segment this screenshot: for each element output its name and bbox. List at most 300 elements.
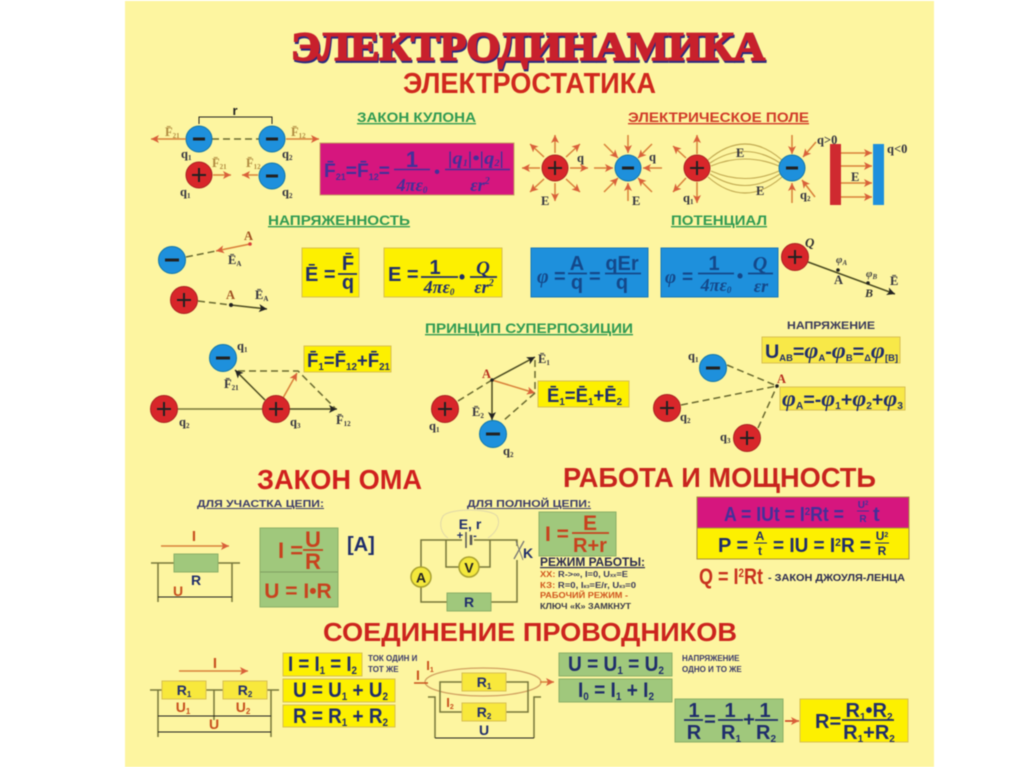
formula: potential sum: φ [782,386,796,411]
formula: E1 = E1 + E2: 1 [559,397,565,408]
formula box: work: 2 [805,506,810,518]
formula: series current: 1 [320,665,325,677]
diagram: Coulomb forces: F̄ [291,125,299,139]
formula: potential sum: =- [803,390,821,411]
diagram: series connection: 1 [187,690,192,699]
diagram: potential of a point charge: B [871,273,877,281]
formula box: work: 2 [865,501,869,507]
diagram: full circuit: A [416,570,426,586]
formula: series current [283,653,362,677]
formula: φ = 1/4πε0 · Q/εr: φ [665,267,676,288]
formula: potential sum: + [841,390,852,411]
formula: voltage: B [846,353,853,363]
diagram: potential superposition: 3 [727,437,731,445]
formula: E = F/q: Ē = [305,264,336,286]
diagram: field superposition: Ē [538,352,546,366]
note: same current: ТОК ОДИН И [368,654,418,663]
diagram: parallel connection: I [416,667,420,683]
formula: φ = 1/4πε0 · Q/εr: 4πε [701,275,727,295]
formula: Coulomb law [320,143,514,195]
diagram: full circuit [411,510,533,611]
formula: parallel resistance: = [704,709,716,731]
diagram: field superposition: 1 [436,426,440,434]
diagram: field strength at point A: А [236,260,241,268]
diagram: parallel connection: I [446,695,450,710]
diagram: potential of a point charge: Q [805,235,815,250]
formula: potential sum: φ [883,386,897,411]
diagram: potential of a point charge: φ [866,268,872,280]
formula: voltage [762,337,900,363]
formula box: work: t [873,504,880,526]
formula: Coulomb law: 21 [336,172,346,182]
diagram: series connection: R [177,682,187,698]
diagram: dipole field lines: 2 [807,195,811,203]
formula: voltage: Δ [864,353,871,363]
note: same current: ТОТ ЖЕ [368,665,399,674]
formula: parallel current: 0 [583,691,589,703]
formula: Coulomb law: 1 [463,158,468,168]
diagram: Coulomb forces: q [282,185,289,199]
formula box: full-circuit Ohm's law: E [583,512,597,535]
formula: φ = A/q = qEr/q: φ [537,266,549,288]
formula: parallel resistance: R [687,722,702,744]
formula: E = F/q: q [342,272,354,294]
note: same voltage: НАПРЯЖЕНИЕ [682,654,740,663]
formula: E = 1/4πε0 · Q/εr² [384,248,502,297]
diagram: circuit section: R [191,572,201,588]
diagram: field of positive charge: q [577,151,584,165]
formula: φ = 1/4πε0 · Q/εr: • [737,266,743,286]
formula: E1 = E1 + E2: 1 [588,397,594,408]
diagram: full circuit: K [523,545,533,561]
diagram: dipole field lines: q [800,188,807,202]
diagram: parallel connection [414,658,554,738]
formula: E1 = E1 + E2: Ē [547,386,560,407]
diagram: series connection: U [209,716,219,732]
formula: φ = 1/4πε0 · Q/εr: = [682,267,693,288]
formula: voltage: = [793,342,804,363]
diagram: Coulomb forces: 12 [254,163,261,171]
formula: parallel voltage: U = U [568,653,622,676]
diagram: force superposition [150,339,351,430]
note: same current [368,654,418,674]
formula: series current: I = I [288,653,324,676]
formula: equivalent resistance: 2 [887,712,893,723]
arrow: to equivalent resistance [785,720,799,722]
diagram: full circuit: V [464,560,474,576]
diagram: series connection: U [176,699,186,715]
diagram: parallel connection: 2 [487,712,492,721]
formula: Coulomb law: 1 [406,147,418,172]
diagram: force superposition: 3 [297,422,301,430]
diagram: field strength at point A: А [244,229,253,243]
diagram: series connection: I [213,655,217,672]
diagram: Coulomb forces: q [181,147,188,161]
formula: voltage: - [825,342,832,363]
diagram: field strength at point A [158,229,268,314]
text block: operating modes: ХХ: R->∞, I=0, U хх=E [540,570,629,579]
formula: equivalent resistance: 2 [889,734,895,745]
formula: E = 1/4πε0 · Q/εr²: • [459,267,465,287]
diagram: parallel connection: R [477,704,487,720]
diagram: potential superposition: q [720,430,727,444]
formula: Coulomb law: F̄ [324,161,336,182]
formula: Coulomb law: εr [470,175,485,195]
diagram: force superposition: q [179,415,186,429]
diagram: field of negative charge: E [632,194,640,208]
formula: parallel resistance: 2 [770,734,776,745]
formula box: Ohm's law: I = [278,538,303,563]
diagram: potential of a point charge: B [864,286,873,300]
heading: potential: ПОТЕНЦИАЛ [671,213,767,228]
formula: parallel resistance: R [756,722,770,744]
diagram: field superposition: Ē [472,405,480,419]
formula: parallel resistance: 1 [724,700,736,722]
formula: equivalent resistance: +R [863,722,890,744]
diagram: Coulomb forces: r [232,103,238,118]
diagram: Coulomb forces: 2 [289,192,293,200]
formula box: power: P = [718,535,748,557]
formula: E1 = E1 + E2: +Ē [593,386,617,407]
formula: Coulomb law: | [499,148,504,168]
formula: Coulomb law: 12 [369,172,379,182]
formula: parallel voltage: 1 [617,665,623,677]
formula: voltage: U [765,342,779,363]
formula box: full-circuit Ohm's law: I = [545,523,569,546]
formula: Joule-Lenz law: Rt [744,564,764,589]
formula box: power: 2 [884,532,888,539]
formula: voltage: φ [804,338,818,363]
formula: E = F/q: F̄ [342,253,354,275]
diagram: Coulomb forces: 1 [188,154,192,162]
formula: E = F/q [302,248,359,297]
diagram: field of negative charge [594,135,662,208]
diagram: field superposition: 1 [546,359,550,367]
formula: F1 = F12 + F21: 1 [318,362,324,373]
formula: potential sum: A [796,401,803,412]
formula: E = 1/4πε0 · Q/εr²: 4πε [424,277,450,297]
diagram: force superposition: 2 [186,422,190,430]
formula: φ = A/q = qEr/q: q [616,272,628,294]
formula: potential sum: 1 [835,401,841,412]
formula: parallel current: 2 [648,691,654,703]
diagram: potential of a point charge: Ē [890,274,898,288]
formula: φ = 1/4πε0 · Q/εr: 0 [727,285,732,295]
formula: E = 1/4πε0 · Q/εr²: Q [476,258,490,279]
diagram: field of positive charge [522,135,588,208]
diagram: Coulomb forces: 21 [220,163,227,171]
formula: F1 = F12 + F21: 21 [379,362,390,373]
diagram: force superposition: 12 [344,420,351,428]
formula box: power: R = [841,535,871,557]
heading: electric field: ЭЛЕКТРИЧЕСКОЕ ПОЛЕ [628,110,809,125]
diagram: potential of a point charge: φ [836,254,842,266]
diagram: Coulomb forces: F̄ [212,156,220,170]
diagram: potential of a point charge: A [834,273,843,287]
formula: φ = A/q = qEr/q: q [571,272,583,294]
heading: Ohm's law: ЗАКОН ОМА [257,464,422,495]
diagram: circuit section [151,528,240,602]
diagram: potential superposition [654,349,786,452]
formula: E = 1/4πε0 · Q/εr²: εr [474,277,489,297]
diagram: series connection: 2 [246,707,251,716]
formula: Joule-Lenz law: - ЗАКОН ДЖОУЛЯ-ЛЕНЦА [768,573,905,584]
diagram: parallel connection: U [479,722,489,738]
formula: E1 = E1 + E2 [538,381,629,408]
diagram: charged plates: E [851,170,859,184]
diagram: field superposition: 2 [480,412,484,420]
unit: amperes: [A] [347,534,375,556]
formula: parallel voltage [559,653,672,677]
formula box: work [697,497,909,528]
formula: parallel current: 1 [616,691,621,703]
formula: φ = A/q = qEr/q: = [589,266,601,288]
formula: potential sum: φ [852,386,866,411]
formula box: full-circuit Ohm's law [539,512,616,557]
formula: voltage: = [853,342,864,363]
heading: voltage: НАПРЯЖЕНИЕ [787,320,875,332]
formula: potential sum [780,386,905,412]
formula: series resistance: 2 [382,717,388,729]
formula: parallel resistance: 1 [759,700,771,722]
diagram: Coulomb forces: q [282,147,289,161]
diagram: series connection: 1 [186,707,191,716]
text block: operating modes: РАБОЧИЙ РЕЖИМ - [540,591,628,600]
formula: φ = 1/4πε0 · Q/εr: 1 [708,253,720,275]
diagram: force superposition: 21 [232,384,239,392]
diagram: force superposition: 1 [244,346,248,354]
formula box: power: U [876,529,884,543]
formula: E = 1/4πε0 · Q/εr²: 0 [450,287,455,297]
formula: parallel current: = I [589,679,616,702]
diagram: field superposition: 2 [510,451,514,459]
diagram: parallel connection: R [477,674,487,690]
text block: operating modes: РЕЖИМ РАБОТЫ: [540,555,645,569]
heading: work and power: РАБОТА И МОЩНОСТЬ [563,462,876,493]
formula: voltage: φ [871,338,885,363]
formula: Joule-Lenz law: Q = I [699,564,747,589]
diagram: parallel connection: 2 [450,704,454,711]
formula: series current: = I [325,653,352,676]
formula box: Ohm's law: R [305,549,321,574]
diagram: potential superposition: 2 [687,417,691,425]
formula: φ = 1/4πε0 · Q/εr [661,248,778,297]
formula: series current: 2 [352,665,357,677]
diagram: potential superposition: q [680,410,687,424]
formula: E = 1/4πε0 · Q/εr²: 2 [488,278,494,289]
formula: parallel resistance: R [721,722,735,744]
heading: superposition principle: ПРИНЦИП СУПЕРПОЗИЦИИ [425,321,633,336]
formula: equivalent resistance: R [843,722,858,744]
formula: Coulomb law: |q [448,148,461,168]
formula: equivalent resistance [800,699,908,745]
formula: voltage: A [818,353,826,363]
diagram: field of negative charge: q [649,150,656,164]
formula: F1 = F12 + F21: +F̄ [357,351,379,372]
formula: φ = A/q = qEr/q: qEr [605,253,639,275]
formula: E1 = E1 + E2: =Ē [565,386,588,407]
formula: E1 = E1 + E2: 2 [617,397,622,408]
diagram: potential of a point charge [782,235,898,300]
note: same voltage: ОДНО И ТО ЖЕ [682,665,742,674]
diagram: field strength at point A: Ē [255,288,263,302]
formula: F1 = F12 + F21 [304,346,391,373]
formula: F1 = F12 + F21: 12 [346,362,357,373]
diagram: charged plates [817,133,907,205]
diagram: series connection: 2 [248,690,253,699]
diagram: field strength at point A: А [263,295,268,303]
formula box: full-circuit Ohm's law: R+r [573,535,607,557]
formula: parallel voltage: = U [623,653,658,676]
diagram: force superposition: F̄ [224,377,232,391]
formula: Coulomb law: |•|q [468,148,494,168]
formula: parallel resistance: 1 [688,700,700,722]
title: ЭЛЕКТРОДИНАМИКА [291,24,765,69]
formula: series voltage [283,679,395,703]
diagram: potential superposition: 1 [695,356,699,364]
formula: series resistance [283,705,395,729]
formula: parallel current [559,679,672,703]
diagram: circuit section: I [192,528,196,545]
heading: field strength: НАПРЯЖЕННОСТЬ [268,213,410,228]
diagram: field superposition [429,352,550,459]
poster background [125,1,934,767]
formula: series resistance: 1 [342,717,347,729]
formula box: Ohm's law: U = I•R [264,580,332,603]
formula: E = 1/4πε0 · Q/εr²: E = [388,264,419,286]
diagram: dipole field lines: 1 [690,198,694,206]
diagram: parallel connection: 1 [487,682,492,691]
formula: φ = 1/4πε0 · Q/εr: εr [754,276,769,296]
formula: parallel voltage: 2 [658,665,664,677]
formula: parallel resistance: 1 [735,734,741,745]
formula: equivalent resistance: •R [866,700,888,722]
formula: equivalent resistance: R [845,700,860,722]
formula: φ = A/q = qEr/q [531,248,648,297]
diagram: Coulomb forces: F̄ [246,156,254,170]
formula: series voltage: U = U [293,679,347,702]
formula: parallel resistance [675,699,783,745]
formula: potential sum: 2 [866,401,872,412]
formula: φ = A/q = qEr/q: A [570,253,584,275]
formula: voltage: [B] [885,353,898,363]
diagram: Coulomb forces: 1 [187,192,191,200]
subheading: full circuit: ДЛЯ ПОЛНОЙ ЦЕПИ: [467,497,591,510]
formula: Coulomb law: • [434,164,440,181]
formula: equivalent resistance: 1 [860,712,866,723]
diagram: full circuit: E, r [459,516,482,532]
text block: operating modes: КЗ: R=0, I кз=E/r, U кз=0 [540,581,637,590]
subheading: circuit section: ДЛЯ УЧАСТКА ЦЕПИ: [197,499,324,510]
diagram: Coulomb forces [151,103,319,200]
diagram: series connection [150,655,279,737]
heading: conductor connections: СОЕДИНЕНИЕ ПРОВОДНИКОВ [323,617,737,647]
formula: Coulomb law: 0 [423,185,428,195]
formula: Joule-Lenz law [699,564,905,589]
formula: series resistance: + R [347,705,382,728]
diagram: charged plates: q<0 [887,142,907,156]
formula: series voltage: 1 [342,691,347,703]
diagram: circuit section: U [173,583,183,599]
formula: Coulomb law: 4πε [397,175,423,195]
diagram: series connection: R [238,682,248,698]
formula: F1 = F12 + F21: F̄ [307,351,319,372]
formula: E = 1/4πε0 · Q/εr²: 1 [429,257,441,279]
formula: potential sum: 3 [897,401,903,412]
formula: F1 = F12 + F21: =F̄ [324,351,346,372]
diagram: field strength at point A: А [226,288,235,302]
diagram: potential superposition: А [777,372,786,386]
formula: φ = 1/4πε0 · Q/εr: Q [753,253,767,275]
diagram: full circuit: - [473,530,477,542]
formula box: power: R [878,544,887,558]
note: same voltage [682,654,742,674]
formula: Joule-Lenz law: 2 [739,566,744,580]
diagram: field superposition: q [429,419,436,433]
diagram: series connection: U [236,699,246,715]
diagram: field of positive charge: E [541,194,549,208]
diagram: Coulomb forces: 21 [173,132,180,140]
formula box: power: t [758,544,762,558]
heading: electrostatics: ЭЛЕКТРОСТАТИКА [403,68,656,100]
formula box: work: Rt = [810,504,844,526]
formula box: work: U [858,500,865,511]
text block: operating modes: КЛЮЧ «К» ЗАМКНУТ [540,602,631,611]
diagram: Coulomb forces: q [180,185,187,199]
diagram: dipole field lines: E [756,184,764,198]
formula box: Ohm's law [260,527,338,607]
diagram: dipole field lines: E [736,146,744,160]
heading: Coulomb law: ЗАКОН КУЛОНА [357,110,476,125]
formula: equivalent resistance: 1 [858,734,864,745]
formula: voltage: AB [779,353,793,363]
formula: parallel current: I [578,679,584,702]
diagram: full circuit: + [457,530,463,542]
formula: series voltage: + U [347,679,382,702]
diagram: dipole field lines: q [683,191,690,205]
formula: φ = A/q = qEr/q: = [554,266,566,288]
diagram: Coulomb forces: 12 [299,132,306,140]
diagram: Coulomb forces: F̄ [165,125,173,139]
diagram: potential superposition: q [688,349,695,363]
diagram: potential of a point charge: А [841,259,847,267]
formula box: work: R [859,514,867,525]
diagram: force superposition: q [290,415,297,429]
diagram: field strength at point A: Ē [228,253,236,267]
diagram: field superposition: А [482,367,491,381]
formula: Coulomb law: 2 [484,176,490,187]
diagram: full circuit: R [464,594,474,610]
formula: parallel resistance: + [743,709,755,731]
text block: operating modes [540,555,645,611]
formula: Coulomb law: =F̄ [346,161,369,182]
formula box: power: A [756,529,765,543]
formula box: power [697,528,909,559]
formula: potential sum: φ [821,386,835,411]
formula: potential sum: + [872,390,883,411]
formula box: work: A = IUt = I [724,504,816,526]
formula box: Ohm's law: U [305,527,321,552]
formula: voltage: φ [832,338,846,363]
diagram: field superposition: q [503,444,510,458]
formula: parallel current: + I [621,679,648,702]
diagram: parallel connection: I [426,658,430,673]
formula: Coulomb law: 2 [493,158,500,168]
formula: series voltage: 2 [382,691,388,703]
formula box: power: = IU = I [773,535,839,557]
diagram: force superposition: F̄ [336,413,344,427]
formula: series resistance: R = R [293,705,347,728]
